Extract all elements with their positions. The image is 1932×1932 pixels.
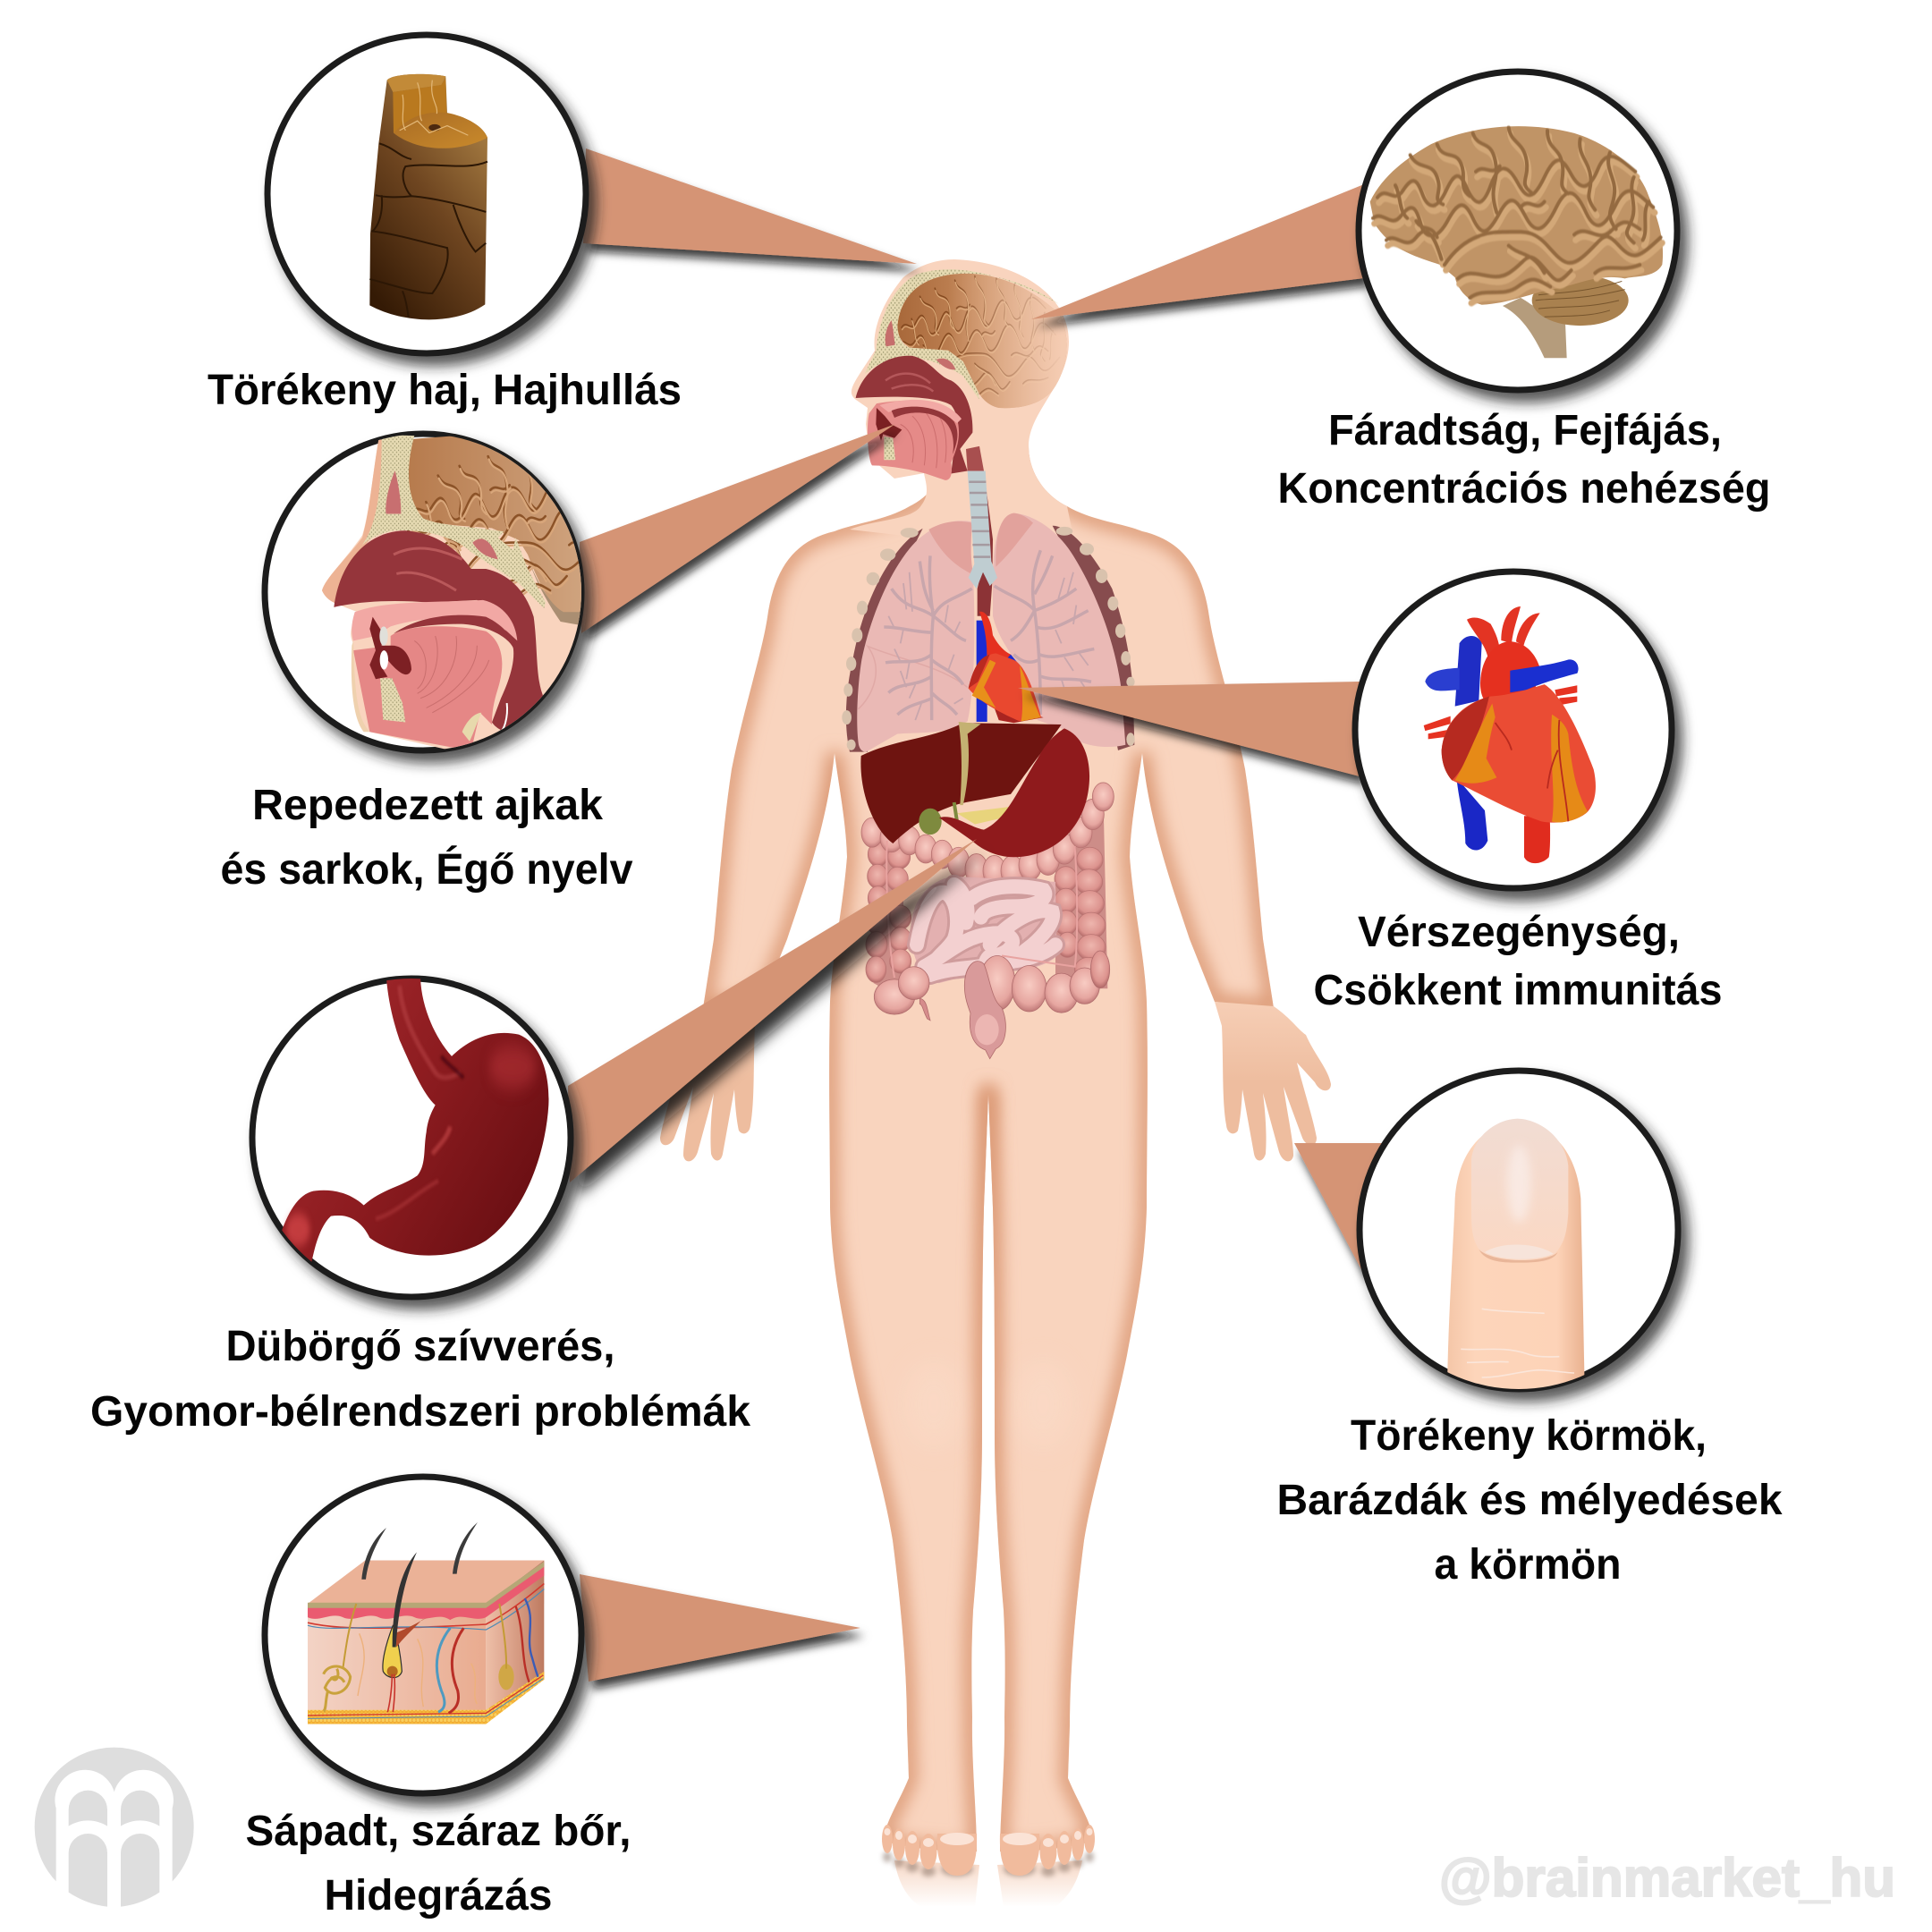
gallbladder	[919, 809, 942, 835]
heading: mouth	[220, 782, 633, 894]
human body figure	[626, 259, 1360, 1907]
head and neck	[850, 259, 1073, 537]
heading: skin: Sápadt, száraz bőr,	[245, 1808, 631, 1855]
rib nodules	[842, 527, 1135, 750]
body silhouette	[703, 447, 1274, 1852]
sphenoid sinus	[936, 359, 955, 369]
watermark handle: @brainmarket_hu	[1439, 1848, 1895, 1908]
wedge: mouth	[580, 424, 895, 633]
toes	[882, 1825, 1095, 1877]
right hand	[1215, 1002, 1331, 1161]
panel: hair circle	[267, 35, 586, 353]
heading: mouth: és sarkok, Égő nyelv	[220, 845, 633, 894]
heading: mouth: Repedezett ajkak	[252, 782, 603, 829]
heading: hair: Törékeny haj, Hajhullás	[208, 367, 682, 414]
wedge: hair	[583, 148, 917, 264]
liver	[860, 723, 1062, 843]
logo watermark	[35, 1748, 194, 1932]
wedge: skin	[580, 1574, 860, 1682]
panel: nail circle	[1360, 1071, 1678, 1389]
small intestine	[911, 877, 1057, 983]
heading: stomach: Gyomor-bélrendszeri problémák	[90, 1388, 750, 1436]
wedge: nail	[1294, 1143, 1385, 1275]
icon: stomach	[280, 975, 548, 1262]
wedge: brain	[1031, 184, 1364, 319]
heading: skin: Hidegrázás	[324, 1872, 553, 1919]
heading: skin	[245, 1808, 631, 1919]
heading: brain: Koncentrációs nehézség	[1277, 465, 1771, 513]
icon: fingernail	[1447, 1119, 1585, 1389]
heading: brain: Fáradtság, Fejfájás,	[1328, 407, 1722, 454]
heading: heart: Vérszegénység,	[1358, 909, 1680, 956]
panel: mouth circle	[265, 430, 640, 766]
heading: brain	[1277, 407, 1771, 513]
nasal cavity	[856, 356, 972, 474]
left lung	[846, 521, 974, 752]
frontal sinus	[886, 320, 895, 346]
internal organs	[842, 269, 1135, 1059]
colon	[861, 783, 1114, 1000]
trachea	[966, 446, 997, 616]
heading: heart: Csökkent immunitás	[1313, 967, 1723, 1014]
skull bone	[865, 269, 1058, 400]
heading: nails: Barázdák és mélyedések	[1277, 1477, 1783, 1524]
icon: hair shaft	[369, 74, 487, 319]
heading: stomach: Dübörgő szívverés,	[225, 1323, 615, 1370]
heading: nails	[1277, 1412, 1783, 1589]
icon: head cross-section	[322, 435, 581, 750]
panel: brain circle	[1359, 72, 1677, 390]
feet reflection	[894, 1860, 1082, 1907]
heading: stomach	[90, 1323, 750, 1436]
panel: heart circle	[1355, 572, 1672, 888]
teeth and lips	[876, 408, 902, 441]
heading: heart	[1313, 909, 1723, 1014]
lower colon and rectum	[874, 841, 1110, 1059]
icon: heart	[1424, 606, 1596, 863]
falciform ligament	[959, 722, 981, 805]
palate	[879, 400, 962, 423]
pancreas	[957, 807, 1011, 825]
wedge: stomach	[568, 839, 977, 1182]
stomach	[939, 728, 1089, 857]
heart	[969, 612, 1044, 723]
icon: brain	[1370, 126, 1663, 358]
panel: stomach circle	[252, 975, 571, 1297]
left hand	[646, 1002, 762, 1161]
heading: nails: Törékeny körmök,	[1351, 1412, 1707, 1460]
right lung	[993, 513, 1134, 750]
pointer wedges	[568, 148, 1385, 1682]
heading: nails: a körmön	[1435, 1541, 1621, 1589]
tongue and oral cavity	[868, 401, 959, 480]
brain in head	[897, 274, 1067, 408]
wedge: heart	[1018, 682, 1360, 776]
panel: skin circle	[265, 1477, 581, 1793]
icon: skin layers	[308, 1522, 544, 1724]
